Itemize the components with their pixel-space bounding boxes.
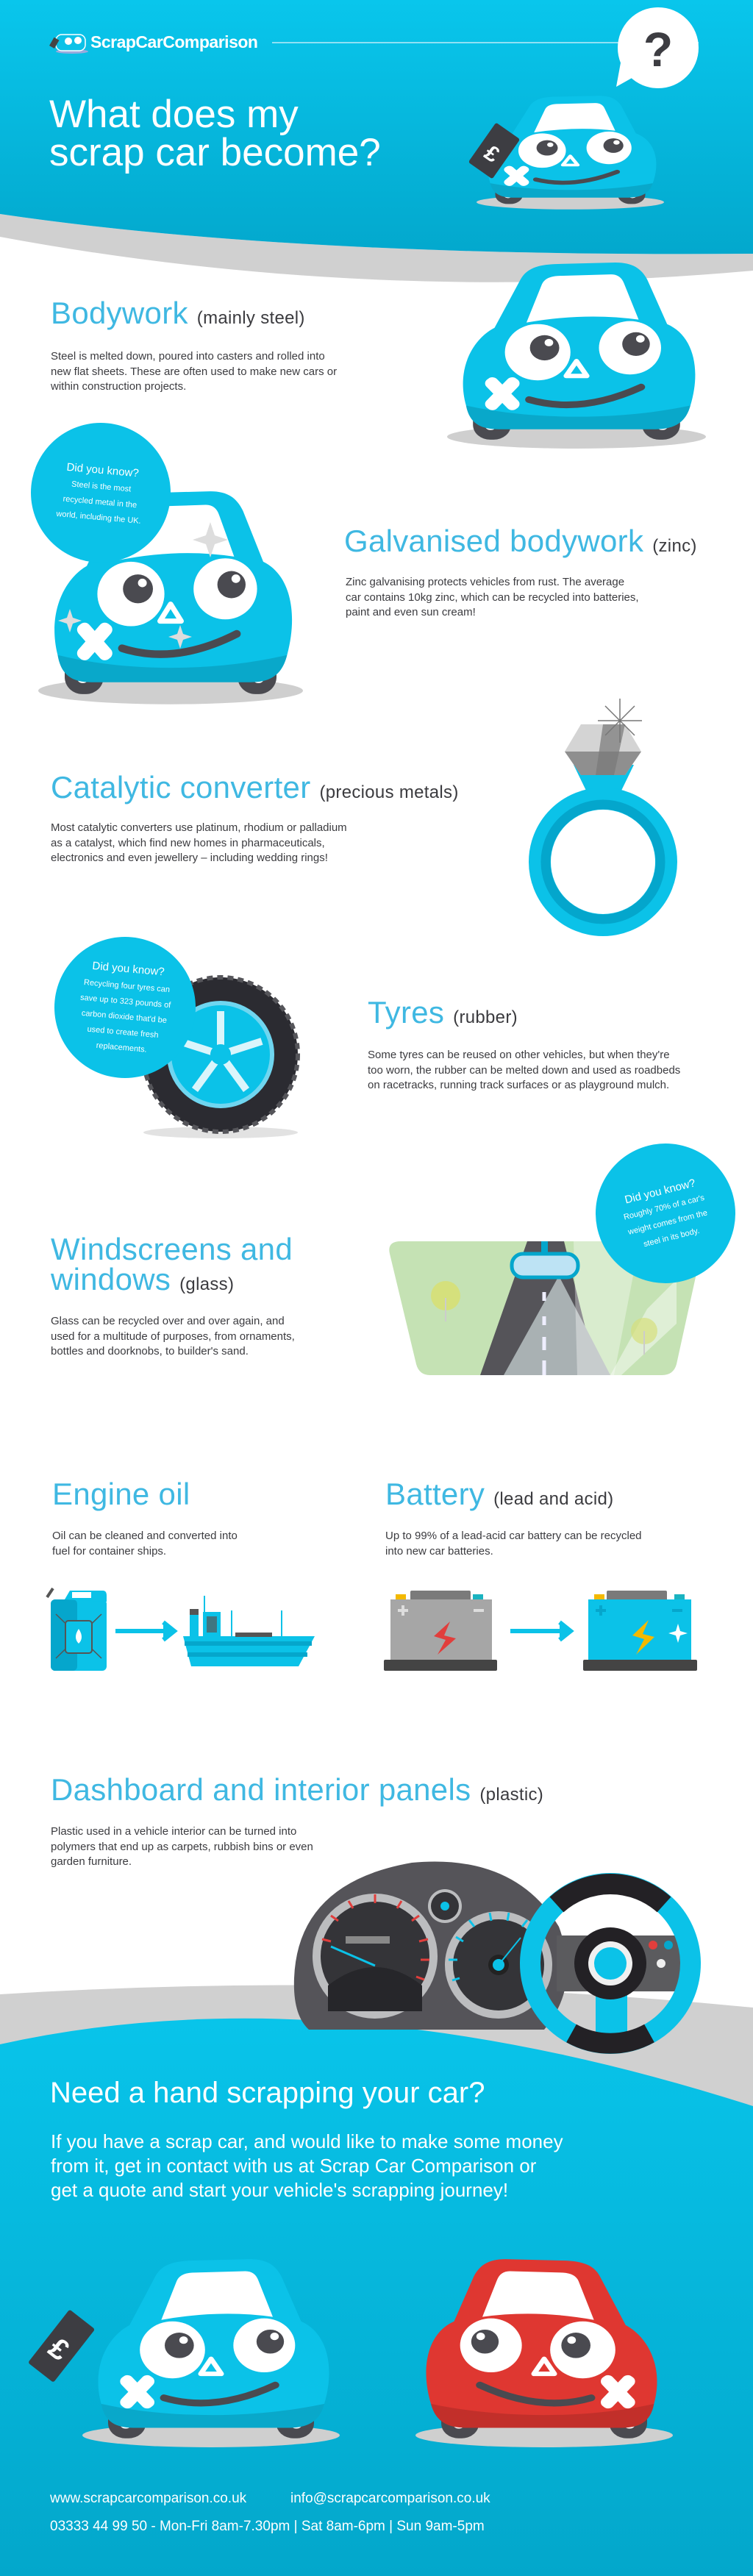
bottom background [0,1985,753,2576]
text: windscreens: Glass can be recycled over and over again, and [51,1315,285,1327]
callout: did you know tyres: Did you know? [92,960,165,978]
text: dashboard: polymers that end up as carpets, rubbish bins or even [51,1840,313,1853]
title: scrap car become? [49,131,381,174]
text: dashboard [51,1825,313,1868]
callout: did you know car weight: weight comes from the [627,1208,708,1237]
heading: call to action: Need a hand scrapping your car? [50,2077,485,2109]
bottom red car [415,2259,673,2447]
icon: new battery [583,1591,697,1671]
text: dashboard: garden furniture. [51,1855,132,1868]
text: call to action: If you have a scrap car, and would like to make some money [51,2130,563,2152]
text: battery: into new car batteries. [385,1544,493,1558]
heading: bodywork: Bodywork (mainly steel) [51,296,305,330]
footer contact [50,2491,490,2534]
text: galvanised: car contains 10kg zinc, which can be recycled into batteries, [346,591,639,603]
steering wheel [530,1883,690,2044]
callout: did you know tyres: Recycling four tyres can [84,978,171,994]
text: dashboard: Plastic used in a vehicle interior can be turned into [51,1825,296,1838]
title: What does my [49,93,299,136]
icon: ring [540,699,666,925]
text: bodywork: Steel is melted down, poured into casters and rolled into [51,350,325,363]
title [49,93,381,174]
text: catalytic: electronics and even jewellery – including wedding rings! [51,852,328,864]
text: bodywork: within construction projects. [51,380,186,393]
bodywork car [447,263,706,449]
text: galvanised [346,576,639,618]
footer contact: info@scrapcarcomparison.co.uk [290,2491,490,2506]
icon: windscreen [389,1241,702,1375]
heading: windscreens: windows (glass) [51,1262,234,1296]
header rule [272,42,699,43]
dashboard [294,1862,567,2030]
icon: ship [183,1596,315,1666]
text: galvanised: paint and even sun cream! [346,606,476,618]
text: windscreens [51,1315,295,1357]
callout: did you know tyres: replacements. [96,1041,147,1055]
text: battery [385,1530,642,1558]
heading: battery: Battery (lead and acid) [385,1477,613,1511]
text: call to action: from it, get in contact with us at Scrap Car Comparison or [51,2155,536,2177]
text: catalytic: as a catalyst, which find new homes in pharmaceuticals, [51,837,325,849]
footer contact: 03333 44 99 50 - Mon-Fri 8am-7.30pm | Sat 8am-6pm | Sun 9am-5pm [50,2519,485,2534]
callout: did you know car weight: steel in its body. [643,1227,701,1249]
text: catalytic [51,821,347,864]
footer contact: www.scrapcarcomparison.co.uk [50,2491,246,2506]
heading: catalytic: Catalytic converter (precious metals) [51,770,459,804]
callout: did you know tyres: used to create fresh [87,1025,159,1040]
logo icon [49,35,88,54]
callout: did you know car weight: Did you know? [624,1177,696,1207]
galvanised car [38,491,303,704]
icon: tyre [143,977,298,1138]
text: windscreens: bottles and doorknobs, to builder's sand. [51,1345,249,1357]
callout: did you know car weight [596,1143,735,1283]
bottom blue car [28,2259,340,2447]
text: tyres: too worn, the rubber can be melted down and used as roadbeds [368,1063,680,1077]
heading: dashboard: Dashboard and interior panels (plastic) [51,1772,543,1807]
text: windscreens: used for a multitude of purposes, from ornaments, [51,1330,295,1343]
heading: windscreens [51,1232,293,1296]
callout: did you know steel [31,423,171,563]
heading: tyres: Tyres (rubber) [368,995,518,1030]
heading: galvanised: Galvanised bodywork (zinc) [344,524,697,558]
logo text: ScrapCarComparison [90,32,257,51]
callout: did you know steel: Steel is the most [71,480,132,494]
text: engine oil [52,1530,238,1558]
hero background [0,0,753,282]
text: call to action [51,2130,563,2201]
text: catalytic: Most catalytic converters use platinum, rhodium or palladium [51,821,347,834]
bottom blue car: £ [43,2332,75,2367]
text: call to action: get a quote and start your vehicle's scrapping journey! [51,2179,508,2201]
callout: did you know steel: Did you know? [66,461,139,479]
text: bodywork [51,350,337,393]
text: engine oil: fuel for container ships. [52,1544,166,1558]
text: tyres: on racetracks, running track surfaces or as playground mulch. [368,1079,669,1091]
heading: engine oil: Engine oil [52,1477,190,1511]
callout: did you know tyres [54,937,196,1078]
hero car [468,96,664,210]
text: tyres: Some tyres can be reused on other vehicles, but when they're [368,1049,670,1061]
icon: jerrycan [47,1588,107,1671]
text: battery: Up to 99% of a lead-acid car battery can be recycled [385,1530,642,1542]
callout: did you know tyres: carbon dioxide that'd be [81,1009,167,1025]
callout: did you know car weight: Roughly 70% of a car's [623,1194,706,1222]
arrow [115,1622,174,1640]
icon: question bubble: ? [643,22,673,76]
callout: did you know steel: world, including the UK. [55,510,141,526]
heading: windscreens: Windscreens and [51,1232,293,1266]
callout: did you know tyres: save up to 323 pounds of [80,993,172,1010]
text: tyres [368,1049,680,1091]
hero car: £ [480,140,504,168]
icon: old battery [384,1591,497,1671]
arrow [510,1622,571,1640]
callout: did you know steel: recycled metal in the [63,495,138,510]
icon: question bubble [616,7,699,88]
text: galvanised: Zinc galvanising protects vehicles from rust. The average [346,576,624,588]
text: engine oil: Oil can be cleaned and converted into [52,1530,238,1542]
text: bodywork: new flat sheets. These are often used to make new cars or [51,365,337,378]
